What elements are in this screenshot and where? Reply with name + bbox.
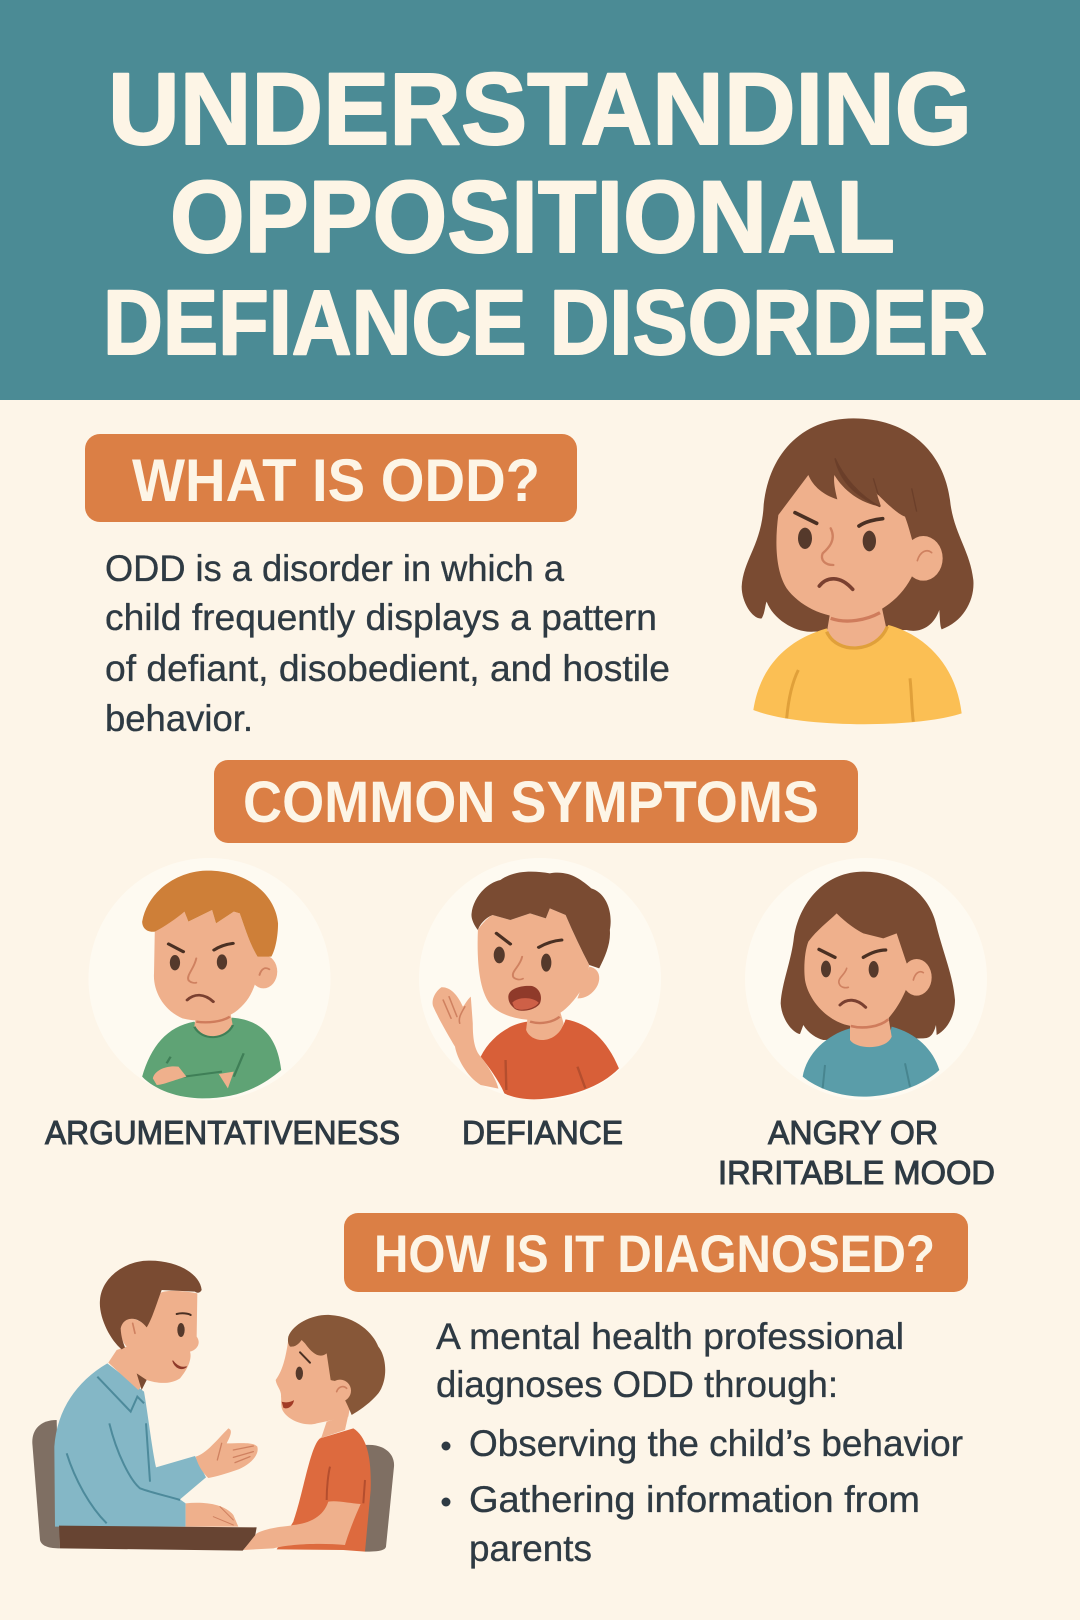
definition text: child frequently displays a pattern <box>105 597 657 638</box>
bullet: observing behavior: Observing the child’s behavior <box>469 1423 963 1464</box>
panel: what is ODD <box>85 418 973 739</box>
title line 3: DEFIANCE DISORDER <box>103 272 987 374</box>
heading pill: how is it diagnosed: HOW IS IT DIAGNOSED? <box>374 1225 935 1284</box>
illustration: angry girl in yellow shirt <box>742 418 973 724</box>
bullet: gathering information: Gathering information from <box>469 1479 920 1520</box>
heading pill: common symptoms: COMMON SYMPTOMS <box>243 770 819 835</box>
symptom: angry or irritable mood <box>718 858 995 1191</box>
definition text: behavior. <box>105 698 253 739</box>
symptom: argumentativeness <box>45 858 400 1151</box>
label: defiance: DEFIANCE <box>462 1114 623 1151</box>
icon: boy with crossed arms <box>142 871 281 1098</box>
diagnosis text <box>436 1316 963 1569</box>
label: angry or irritable mood: IRRITABLE MOOD <box>718 1154 995 1191</box>
bullet: gathering information: parents <box>469 1528 592 1569</box>
definition text <box>105 548 670 739</box>
definition text: ODD is a disorder in which a <box>105 548 564 589</box>
title line 1: UNDERSTANDING <box>108 52 972 166</box>
panel: common symptoms <box>45 760 995 1191</box>
label: angry or irritable mood: ANGRY OR <box>768 1114 938 1151</box>
heading pill: what is ODD <box>85 434 577 522</box>
heading pill: how is it diagnosed <box>344 1213 968 1292</box>
title banner <box>0 0 1080 400</box>
icon: frowning girl in teal shirt <box>781 872 955 1097</box>
diagnosis text: diagnoses ODD through: <box>436 1364 838 1405</box>
diagnosis text: A mental health professional <box>436 1316 904 1357</box>
icon: shouting boy with raised hand <box>433 872 619 1099</box>
symptom: defiance <box>419 858 661 1151</box>
definition text: of defiant, disobedient, and hostile <box>105 648 670 689</box>
label: angry or irritable mood <box>718 1114 995 1191</box>
title line 2: OPPOSITIONAL <box>170 160 895 274</box>
heading pill: what is ODD: WHAT IS ODD? <box>132 447 540 514</box>
label: argumentativeness: ARGUMENTATIVENESS <box>45 1114 400 1151</box>
panel: how is it diagnosed <box>32 1213 968 1569</box>
bullet: gathering information <box>442 1479 920 1569</box>
illustration: professional talking with child <box>32 1261 394 1552</box>
